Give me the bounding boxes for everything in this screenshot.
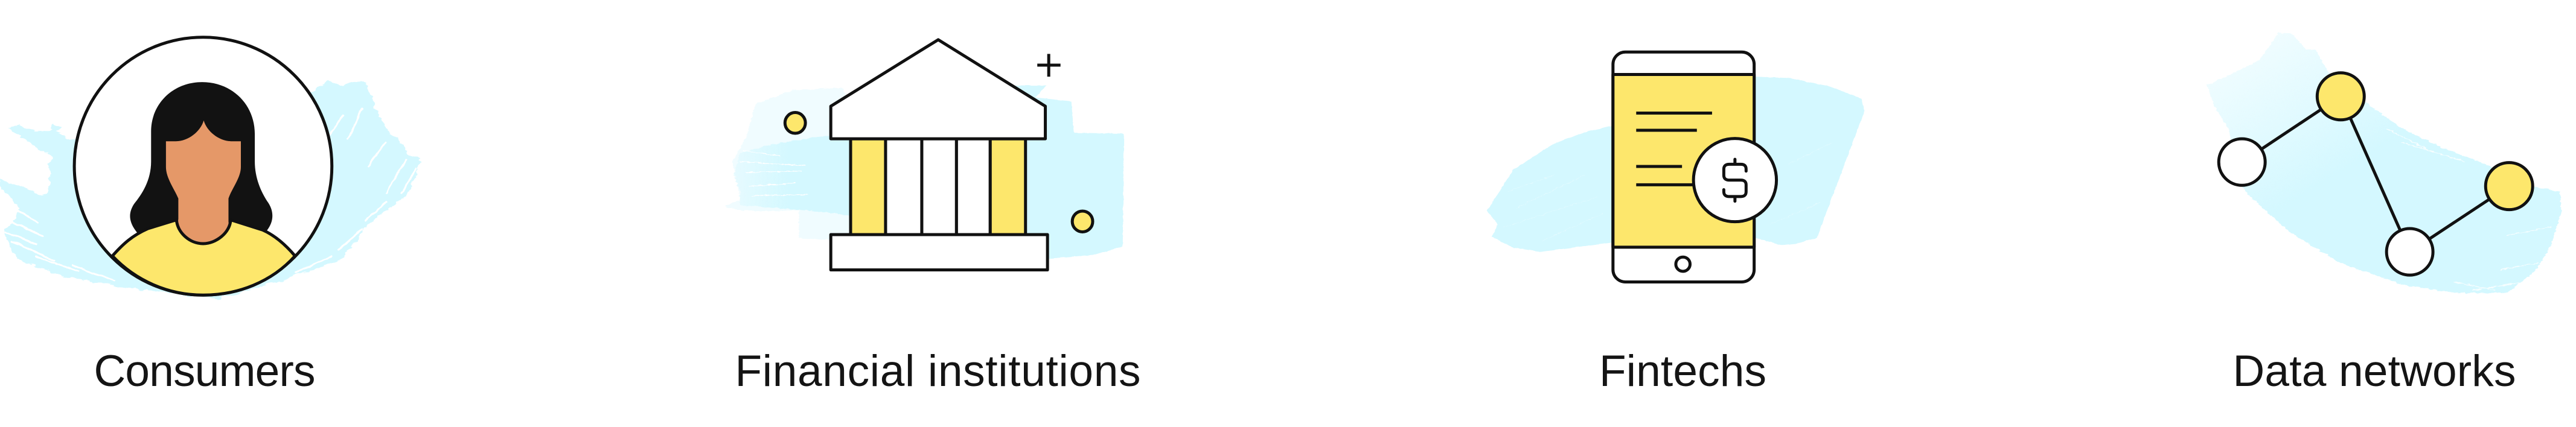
brush stroke: network background (2207, 33, 2562, 293)
panel: fintechs (1487, 52, 1865, 396)
panel: data networks (2207, 33, 2562, 396)
panel: consumers (0, 37, 421, 396)
home button (1676, 257, 1690, 271)
label: Fintechs: Fintechs (1599, 347, 1766, 396)
face and neck (166, 121, 241, 244)
text lines (1636, 113, 1712, 185)
hair (130, 82, 272, 233)
dot left (785, 113, 805, 133)
panel: financial institutions (724, 40, 1141, 396)
label: Data networks: Data networks (2232, 347, 2516, 396)
brush stroke: bank background (724, 86, 1124, 259)
node 1 (2219, 139, 2265, 185)
icon: connected network nodes (2219, 73, 2533, 275)
dot right (1072, 211, 1093, 232)
brush stroke: consumers background (0, 81, 421, 299)
roof (831, 40, 1046, 139)
node 3 (2386, 229, 2433, 275)
node 4 (2485, 163, 2533, 210)
icon: smartphone with dollar coin (1613, 52, 1777, 282)
shirt (112, 220, 295, 295)
dollar sign (1724, 159, 1746, 201)
label: Financial institutions: Financial institutions (735, 347, 1141, 396)
brush stroke: phone background (1487, 77, 1865, 252)
plus sign (1037, 54, 1061, 77)
base (831, 235, 1047, 270)
columns (851, 139, 886, 235)
phone body (1613, 52, 1754, 282)
phone screen (1613, 74, 1754, 247)
icon: person in circle (74, 37, 332, 295)
label: Consumers: Consumers (94, 347, 315, 396)
icon: bank building (785, 40, 1093, 270)
node 2 (2317, 73, 2364, 120)
circle background (74, 37, 332, 295)
dollar coin (1693, 139, 1777, 222)
connecting lines (2242, 96, 2509, 252)
